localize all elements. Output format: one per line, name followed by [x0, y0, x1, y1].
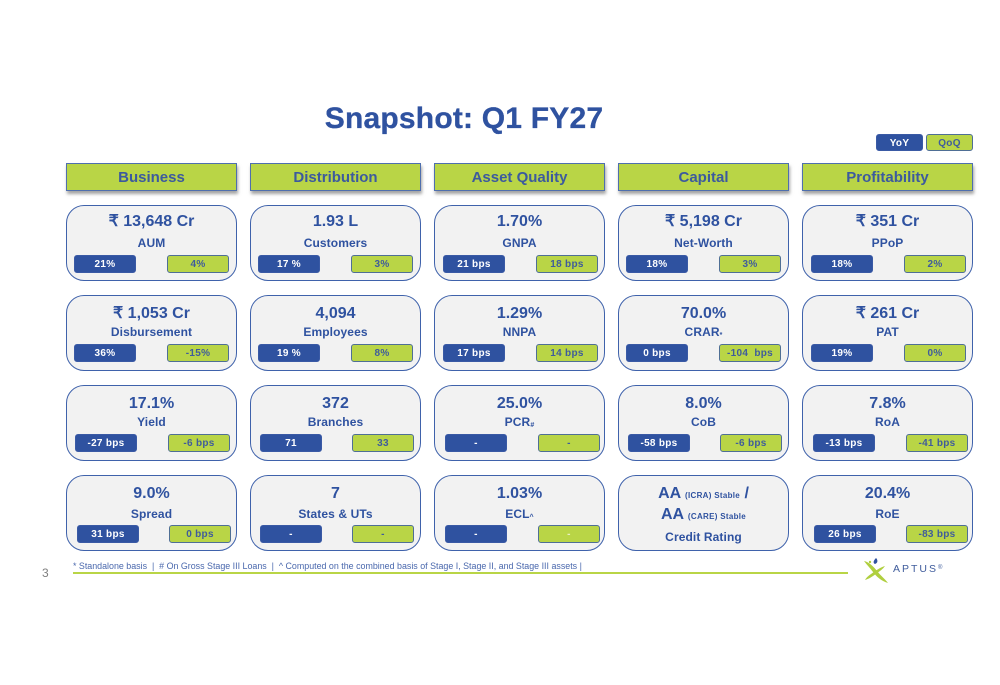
panel: Net-Worth: 18% — [647, 259, 667, 270]
panel: Disbursement: 36% — [95, 348, 115, 359]
panel: PPoP: 18% — [832, 259, 852, 270]
heading: Business: Business — [118, 169, 185, 186]
panel: Credit Rating: AA (CARE) Stable — [661, 506, 746, 523]
panel: Yield: 17.1% — [129, 395, 174, 412]
panel: Customers — [250, 205, 421, 281]
panel: Disbursement: ₹ 1,053 Cr — [113, 305, 190, 322]
panel: PAT: ₹ 261 Cr — [856, 305, 919, 322]
panel: RoE: 26 bps — [828, 529, 862, 540]
panel: Yield: Yield — [137, 415, 166, 429]
panel: NNPA: 17 bps — [457, 348, 491, 359]
panel: RoE: RoE — [875, 507, 900, 521]
panel: RoA: 7.8% — [869, 395, 906, 412]
panel: Net-Worth: Net-Worth — [674, 236, 733, 250]
panel: CoB: 8.0% — [685, 395, 722, 412]
panel: PAT: 0% — [927, 348, 943, 359]
panel: Net-Worth: 3% — [742, 259, 758, 270]
panel: Yield: -6 bps — [183, 438, 215, 449]
panel: Branches: Branches — [308, 415, 363, 429]
panel: Disbursement: -15% — [186, 348, 210, 359]
panel: States and UTs: - — [289, 529, 293, 540]
panel: Spread: Spread — [131, 507, 172, 521]
panel: ECL: 1.03% — [497, 485, 542, 502]
legend QoQ: QoQ — [938, 138, 961, 149]
panel: GNPA — [434, 205, 605, 281]
panel: Disbursement: Disbursement — [111, 325, 192, 339]
panel: Credit Rating: AA (ICRA) Stable / — [658, 485, 749, 502]
panel: NNPA: 1.29% — [497, 305, 542, 322]
panel: Employees — [250, 295, 421, 371]
legend QoQ — [926, 134, 973, 151]
panel: Spread — [66, 475, 237, 551]
legend: YoY and QoQ — [876, 134, 973, 151]
panel: Branches — [250, 385, 421, 461]
panel: Branches: 372 — [322, 395, 349, 412]
panel: Net-Worth: ₹ 5,198 Cr — [665, 213, 742, 230]
panel: CoB — [618, 385, 789, 461]
heading: Capital — [618, 163, 789, 191]
panel: Customers: 1.93 L — [313, 213, 358, 230]
panel: Branches: 33 — [377, 438, 389, 449]
panel: RoE: -83 bps — [918, 529, 956, 540]
heading: Asset Quality: Asset Quality — [472, 169, 567, 186]
panel: GNPA: 1.70% — [497, 213, 542, 230]
panel: Employees: Employees — [303, 325, 368, 339]
panel: Net-Worth — [618, 205, 789, 281]
panel: PAT: PAT — [876, 325, 899, 339]
panel: AUM — [66, 205, 237, 281]
panel: States and UTs: States & UTs — [298, 507, 373, 521]
panel: CoB: -6 bps — [735, 438, 767, 449]
panel: RoA: -13 bps — [825, 438, 863, 449]
footnote: * Standalone basis | # On Gross Stage III Loans | ^ Computed on the combined basis of Stage I, Stage II, and Stage III assets | — [73, 561, 582, 571]
heading: Capital: Capital — [678, 169, 728, 186]
panel: RoA: -41 bps — [918, 438, 956, 449]
panel: PPoP — [802, 205, 973, 281]
panel: GNPA: GNPA — [502, 236, 537, 250]
panel: Employees: 8% — [374, 348, 390, 359]
panel: ECL: ECL^ — [505, 507, 534, 521]
panel: AUM: 21% — [95, 259, 115, 270]
panel: NNPA: NNPA — [503, 325, 536, 339]
heading: Distribution: Distribution — [293, 169, 378, 186]
panel: Customers: 17 % — [277, 259, 301, 270]
panel: PCR: 25.0% — [497, 395, 542, 412]
panel: Spread: 0 bps — [186, 529, 214, 540]
panel: AUM: ₹ 13,648 Cr — [109, 213, 194, 230]
panel: Customers: Customers — [304, 236, 367, 250]
panel: PPoP: 2% — [927, 259, 943, 270]
panel: Customers: 3% — [374, 259, 390, 270]
panel: PPoP: ₹ 351 Cr — [856, 213, 919, 230]
legend YoY: YoY — [890, 138, 909, 149]
panel: PAT — [802, 295, 973, 371]
page number: 3 — [42, 566, 49, 580]
panel: CRAR: -104 bps — [727, 348, 773, 359]
panel: States and UTs — [250, 475, 421, 551]
panel: CRAR: CRAR* — [685, 325, 722, 339]
panel: Employees: 19 % — [277, 348, 301, 359]
heading: Profitability — [802, 163, 973, 191]
heading: Asset Quality — [434, 163, 605, 191]
panel: Spread: 9.0% — [133, 485, 170, 502]
panel: PCR: - — [474, 438, 478, 449]
panel: Disbursement — [66, 295, 237, 371]
panel: PCR: PCR# — [505, 415, 534, 429]
panel: AUM: 4% — [190, 259, 206, 270]
legend YoY — [876, 134, 923, 151]
panel: GNPA: 21 bps — [457, 259, 491, 270]
panel: PAT: 19% — [832, 348, 852, 359]
panel: CRAR — [618, 295, 789, 371]
panel: Yield: -27 bps — [87, 438, 125, 449]
icon: Aptus mark — [864, 558, 888, 583]
panel: RoE — [802, 475, 973, 551]
panel: States and UTs: - — [381, 529, 385, 540]
panel: RoA — [802, 385, 973, 461]
heading: Business — [66, 163, 237, 191]
panel: CoB: CoB — [691, 415, 716, 429]
panel: NNPA — [434, 295, 605, 371]
panel: ECL: - — [567, 529, 571, 540]
heading: Profitability: Profitability — [846, 169, 929, 186]
logo wordmark: APTUS® — [893, 563, 944, 575]
panel: AUM: AUM — [138, 236, 165, 250]
logo: Aptus — [864, 558, 944, 583]
panel: RoE: 20.4% — [865, 485, 910, 502]
panel: Credit Rating — [618, 475, 789, 551]
panel: Employees: 4,094 — [315, 305, 356, 322]
panel: PCR: - — [567, 438, 571, 449]
panel: Branches: 71 — [285, 438, 297, 449]
heading: Distribution — [250, 163, 421, 191]
panel: CRAR: 70.0% — [681, 305, 726, 322]
panel: ECL: - — [474, 529, 478, 540]
title: Snapshot: Q1 FY27 — [325, 102, 603, 135]
panel: Credit Rating: Credit Rating — [665, 530, 742, 544]
panel: PCR — [434, 385, 605, 461]
panel: Yield — [66, 385, 237, 461]
panel: GNPA: 18 bps — [550, 259, 584, 270]
panel: PPoP: PPoP — [872, 236, 903, 250]
panel: NNPA: 14 bps — [550, 348, 584, 359]
panel: RoA: RoA — [875, 415, 900, 429]
panel: States and UTs: 7 — [331, 485, 340, 502]
panel: ECL — [434, 475, 605, 551]
panel: Spread: 31 bps — [91, 529, 125, 540]
panel: CoB: -58 bps — [640, 438, 678, 449]
panel: CRAR: 0 bps — [643, 348, 671, 359]
